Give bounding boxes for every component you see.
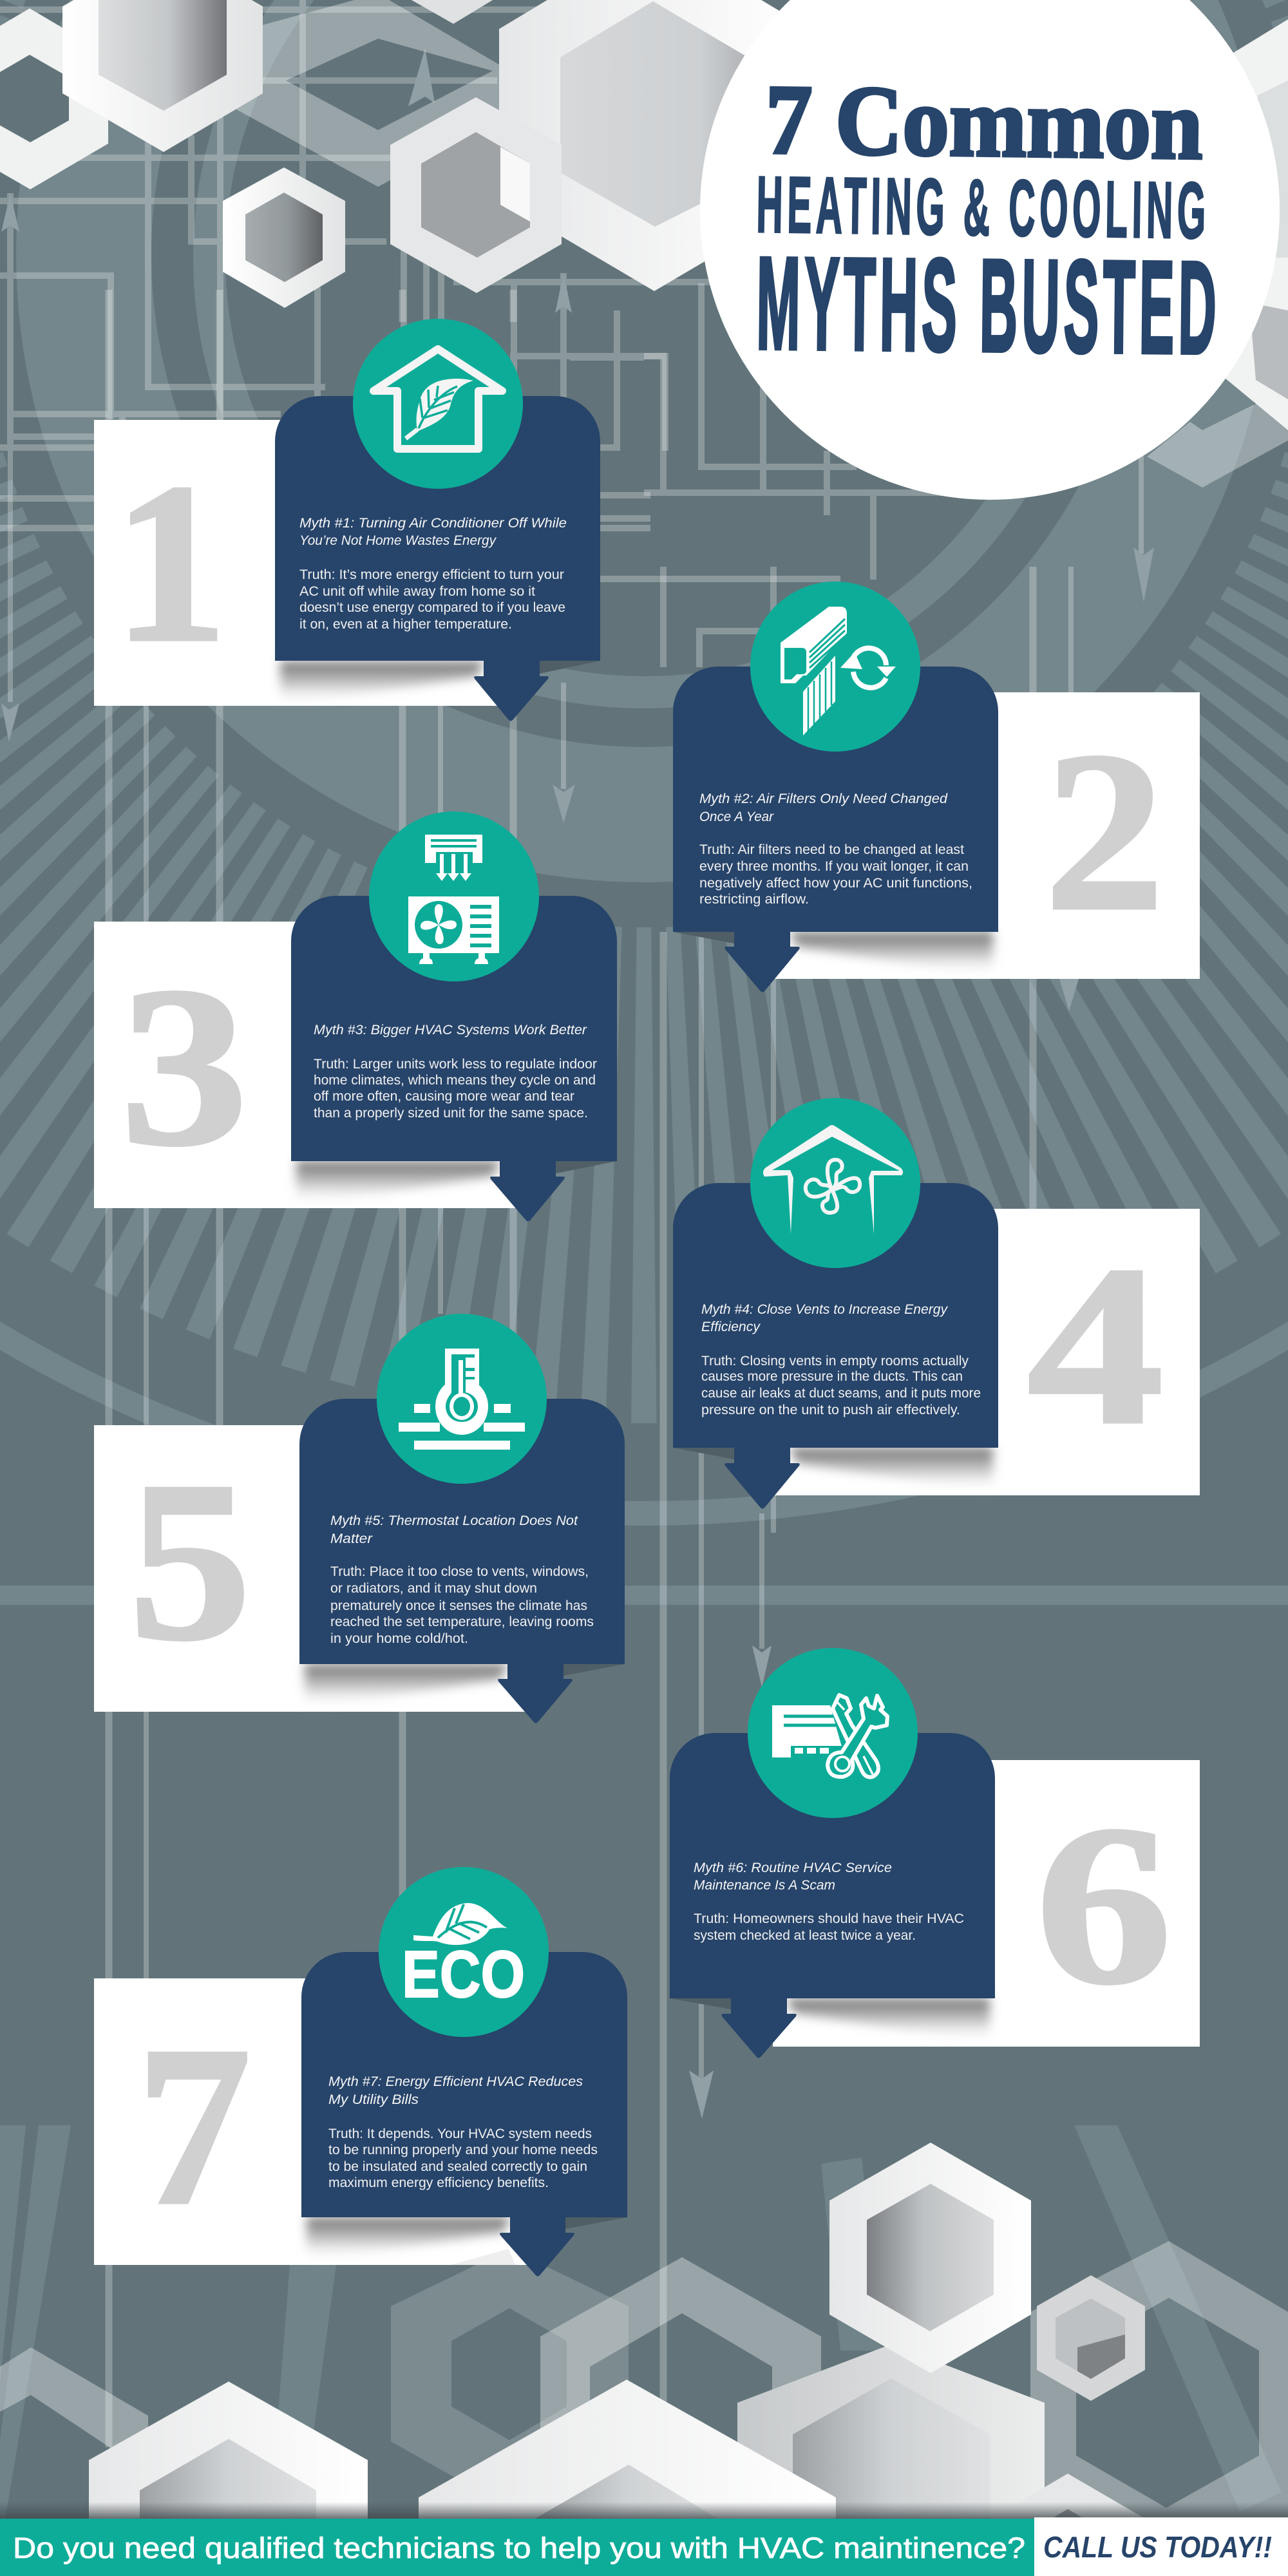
icon: eco leaf xyxy=(402,1903,525,2011)
truth 7: to be insulated and sealed correctly to gain xyxy=(328,2159,587,2174)
white number card 6 xyxy=(773,1760,1200,2047)
hexagon: bottom centre xyxy=(419,2380,836,2524)
truth 3: home climates, which means they cycle on and xyxy=(314,1073,596,1088)
panel: myth 1 xyxy=(94,319,600,721)
icon: house with leaf xyxy=(374,349,502,449)
navy callout 7 with arrow xyxy=(301,1952,627,2276)
wedge shadow 5 xyxy=(564,1664,625,1676)
icon circle 7 xyxy=(379,1867,549,2037)
navy callout 5 with arrow xyxy=(299,1399,625,1723)
number 7: 7 xyxy=(137,2000,251,2252)
truth 7: maximum energy efficiency benefits. xyxy=(328,2175,549,2190)
translucent hexagons top xyxy=(236,0,1288,488)
navy callout 3 with arrow xyxy=(291,896,617,1221)
hexagon: bottom left xyxy=(89,2382,368,2524)
shadow 2 xyxy=(790,932,993,976)
truth 7: Truth: It depends. Your HVAC system needs xyxy=(328,2126,592,2141)
number 3: 3 xyxy=(120,940,248,1193)
heading 6 xyxy=(694,1861,892,1893)
ECO label: ECO xyxy=(402,1937,525,2011)
hexagon: medium xyxy=(390,97,562,293)
truth 4: pressure on the unit to push air effectively. xyxy=(701,1403,960,1417)
heading 6: Maintenance Is A Scam xyxy=(694,1878,835,1893)
white number card 3 xyxy=(94,922,526,1208)
shadow 7 xyxy=(307,2217,510,2261)
hexagon: top large xyxy=(62,0,263,152)
bottom translucent hexagons xyxy=(0,2241,1288,2518)
title badge xyxy=(700,0,1280,500)
heading 5 xyxy=(330,1513,578,1546)
truth 3: Truth: Larger units work less to regulate indoor xyxy=(314,1057,597,1072)
truth 4: Truth: Closing vents in empty rooms actually xyxy=(701,1354,969,1368)
hexagon: bottom small grey xyxy=(1037,2275,1145,2401)
truth 6: Truth: Homeowners should have their HVAC xyxy=(694,1911,964,1926)
number 2: 2 xyxy=(1045,705,1164,958)
panel: myth 5 xyxy=(94,1314,625,1723)
truth 7: to be running properly and your home needs xyxy=(328,2143,598,2157)
truth 5: in your home cold/hot. xyxy=(330,1631,468,1646)
navy callout 4 with arrow xyxy=(673,1183,998,1508)
icon: thermometer xyxy=(399,1349,525,1450)
navy callout 1 with arrow xyxy=(275,396,600,721)
truth 4: causes more pressure in the ducts. This can xyxy=(701,1369,963,1384)
hexagon: small xyxy=(223,167,345,308)
heading 4 xyxy=(701,1302,948,1334)
heading 1 xyxy=(299,516,567,548)
truth 7 xyxy=(328,2126,598,2190)
hexagon: top small centre xyxy=(412,0,493,24)
hexagon: bottom right tall xyxy=(829,2143,1031,2373)
shadow 3 xyxy=(296,1161,500,1205)
number 1: 1 xyxy=(113,437,227,689)
wedge shadow 7 xyxy=(565,2217,627,2229)
truth 2: restricting airflow. xyxy=(699,892,809,907)
title line: MYTHS BUSTED: MYTHS BUSTED xyxy=(756,229,1217,381)
heading 5: Myth #5: Thermostat Location Does Not xyxy=(330,1513,578,1528)
truth 5 xyxy=(330,1564,594,1646)
heading 5: Matter xyxy=(330,1531,373,1546)
truth 1 xyxy=(299,567,565,632)
white number card 2 xyxy=(773,692,1200,979)
truth 1: doesn’t use energy compared to if you leave xyxy=(299,600,565,615)
wedge shadow 2 xyxy=(673,932,734,943)
heading 1: You’re Not Home Wastes Energy xyxy=(299,533,497,548)
heading 7 xyxy=(328,2074,583,2107)
translucent overlap on card xyxy=(451,2249,515,2265)
shadow above footer xyxy=(0,2502,1288,2519)
shadow 6 xyxy=(787,1998,990,2042)
truth 4 xyxy=(701,1354,981,1417)
icon: air conditioner filter xyxy=(781,607,896,735)
right side hexagon xyxy=(1225,19,1288,430)
truth 2: every three months. If you wait longer, it can xyxy=(699,859,969,874)
heading 7: My Utility Bills xyxy=(328,2092,419,2107)
truth 1: AC unit off while away from home so it xyxy=(299,584,535,599)
icon circle 6 xyxy=(748,1648,918,1818)
panel: myth 6 xyxy=(670,1648,1200,2058)
number 6: 6 xyxy=(1036,1779,1172,2031)
wedge shadow 4 xyxy=(673,1448,734,1459)
wedge shadow 3 xyxy=(556,1161,617,1173)
truth 5: or radiators, and it may shut down xyxy=(330,1581,537,1596)
panel: myth 2 xyxy=(673,582,1200,992)
shadow 1 xyxy=(280,661,484,705)
icon: house with fan xyxy=(763,1125,903,1234)
heading 7: Myth #7: Energy Efficient HVAC Reduces xyxy=(328,2074,583,2089)
wedge shadow 1 xyxy=(540,661,600,674)
truth 3: than a properly sized unit for the same space. xyxy=(314,1106,588,1121)
truth 6: system checked at least twice a year. xyxy=(694,1928,916,1943)
title line: 7 Common: 7 Common xyxy=(765,65,1204,180)
small background arrows xyxy=(1,48,1154,2119)
wedge shadow 6 xyxy=(670,1998,731,2009)
shadow 4 xyxy=(790,1448,993,1492)
hexagon: top left xyxy=(0,8,108,189)
heading 4: Myth #4: Close Vents to Increase Energy xyxy=(701,1302,948,1317)
heading 1: Myth #1: Turning Air Conditioner Off While xyxy=(299,516,567,531)
truth 2: Truth: Air filters need to be changed at least xyxy=(699,842,964,857)
icon circle 5 xyxy=(377,1314,547,1484)
hexagon: bottom grey large xyxy=(737,2344,1045,2524)
truth 5: reached the set temperature, leaving rooms xyxy=(330,1615,594,1629)
truth 3: off more often, causing more wear and tear xyxy=(314,1089,574,1104)
truth 5: Truth: Place it too close to vents, windows, xyxy=(330,1564,589,1579)
panel: myth 3 xyxy=(94,811,617,1221)
icon circle 2 xyxy=(750,582,920,752)
truth 4: cause air leaks at duct seams, and it puts more xyxy=(701,1386,981,1401)
white number card 7 xyxy=(94,1978,535,2265)
heading 6: Myth #6: Routine HVAC Service xyxy=(694,1861,892,1875)
truth 1: it on, even at a higher temperature. xyxy=(299,617,512,632)
white number card 4 xyxy=(773,1209,1200,1495)
icon: air conditioner and tools xyxy=(772,1695,887,1777)
truth 6 xyxy=(694,1911,964,1943)
heading 2: Once A Year xyxy=(699,810,774,824)
truth 2: negatively affect how your AC unit functions, xyxy=(699,876,972,891)
heading 2: Myth #2: Air Filters Only Need Changed xyxy=(699,791,948,806)
white number card 1 xyxy=(94,420,509,706)
icon circle 3 xyxy=(369,811,539,981)
number 5: 5 xyxy=(129,1435,251,1687)
heading 4: Efficiency xyxy=(701,1320,761,1334)
heading 2 xyxy=(699,791,948,824)
footer bar xyxy=(0,2517,1288,2576)
panel: myth 7 xyxy=(94,1867,627,2276)
navy callout 2 with arrow xyxy=(673,667,998,992)
hexagon: large behind title xyxy=(499,0,810,291)
icon circle 1 xyxy=(353,319,523,489)
truth 1: Truth: It’s more energy efficient to turn your xyxy=(299,567,564,582)
truth 2 xyxy=(699,842,972,907)
white number card 5 xyxy=(94,1425,532,1712)
panel: myth 4 xyxy=(673,1098,1200,1508)
footer question: Do you need qualified technicians to help you with HVAC maintinence? xyxy=(13,2532,1025,2564)
icon: indoor and outdoor units xyxy=(408,835,499,964)
hexagon: bottom small white xyxy=(990,2474,1146,2519)
truth 3 xyxy=(314,1057,597,1121)
navy callout 6 with arrow xyxy=(670,1733,995,2058)
number 4: 4 xyxy=(1027,1219,1164,1472)
truth 5: prematurely once it senses the climate has xyxy=(330,1598,587,1613)
footer call panel xyxy=(1034,2517,1288,2576)
title line: HEATING & COOLING: HEATING & COOLING xyxy=(756,161,1206,256)
heading 3: Myth #3: Bigger HVAC Systems Work Better xyxy=(314,1023,587,1037)
icon circle 4 xyxy=(750,1098,920,1268)
shadow 5 xyxy=(305,1664,507,1708)
